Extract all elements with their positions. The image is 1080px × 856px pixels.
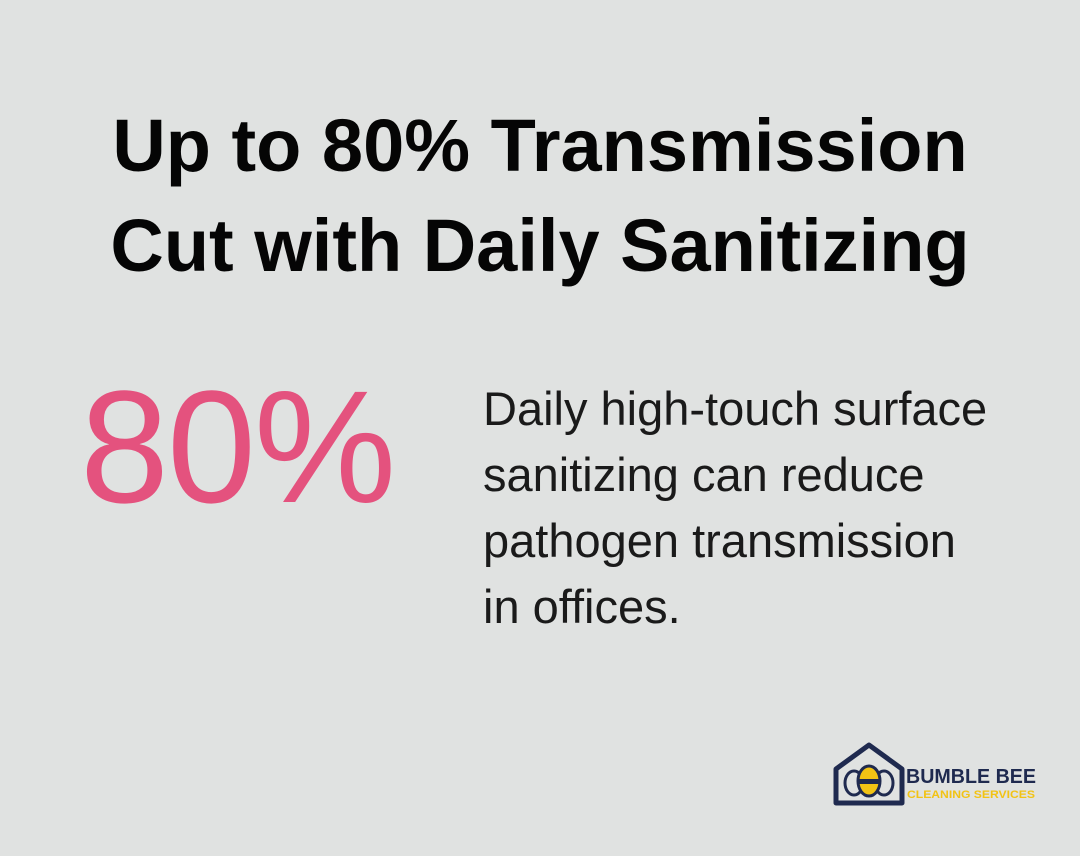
description text: pathogen transmission <box>483 514 956 567</box>
title: Up to 80% Transmission <box>112 104 968 187</box>
description text: Daily high-touch surface <box>483 382 987 435</box>
logo text: BUMBLE BEE <box>906 766 1036 788</box>
big statistic: 80% <box>80 357 394 536</box>
title: Cut with Daily Sanitizing <box>110 204 970 287</box>
description text: sanitizing can reduce <box>483 448 925 501</box>
title <box>110 104 970 287</box>
description text <box>483 382 987 633</box>
logo text: CLEANING SERVICES <box>907 789 1035 801</box>
logo text <box>906 766 1036 801</box>
description text: in offices. <box>483 580 681 633</box>
icon: house with bee <box>836 745 902 803</box>
logo: Bumble Bee Cleaning Services <box>834 742 1036 806</box>
